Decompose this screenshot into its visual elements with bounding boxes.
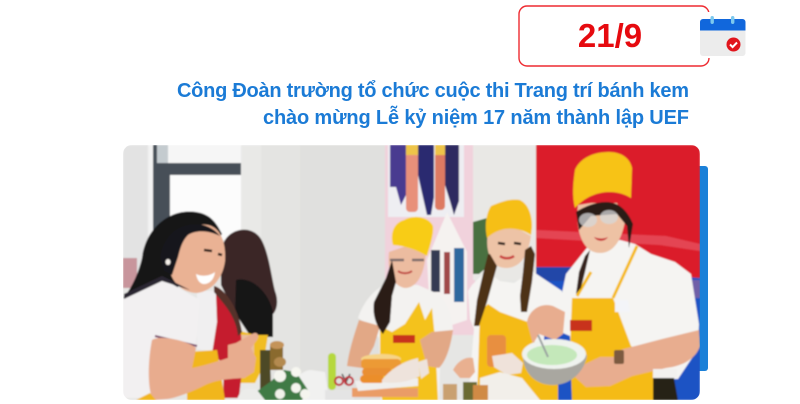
wall right of poster (472, 145, 476, 280)
cake (352, 354, 429, 397)
date badge (519, 6, 709, 66)
pink object at left edge (123, 258, 137, 288)
blue accent bar behind photo (690, 166, 708, 371)
icon: calendar (699, 12, 747, 58)
mixing bowl (522, 335, 587, 385)
left wall (123, 145, 148, 270)
date text: 21/9 (578, 17, 642, 54)
red apron person (187, 286, 243, 400)
title: Công Đoàn trường tổ chức cuộc thi Trang trí bánh kem (177, 80, 689, 102)
white wall (241, 145, 386, 400)
title: chào mừng Lễ kỷ niệm 17 năm thành lập UEF (263, 105, 689, 129)
red backdrop (536, 145, 700, 278)
bamboo decoration (260, 341, 286, 390)
green spatula and scissors (325, 353, 354, 400)
plant (473, 218, 493, 274)
blue backdrop (543, 276, 700, 400)
flowers (237, 367, 329, 400)
wall background (123, 240, 518, 400)
photo: cake decorating contest (123, 145, 700, 400)
back person (221, 230, 277, 383)
poster (385, 145, 475, 335)
woman at left (123, 211, 258, 400)
woman 3 with braids (443, 199, 565, 400)
title (177, 80, 689, 129)
woman 4 with tall hat (527, 152, 700, 400)
woman 2 with hat (347, 217, 453, 400)
window (153, 145, 241, 240)
